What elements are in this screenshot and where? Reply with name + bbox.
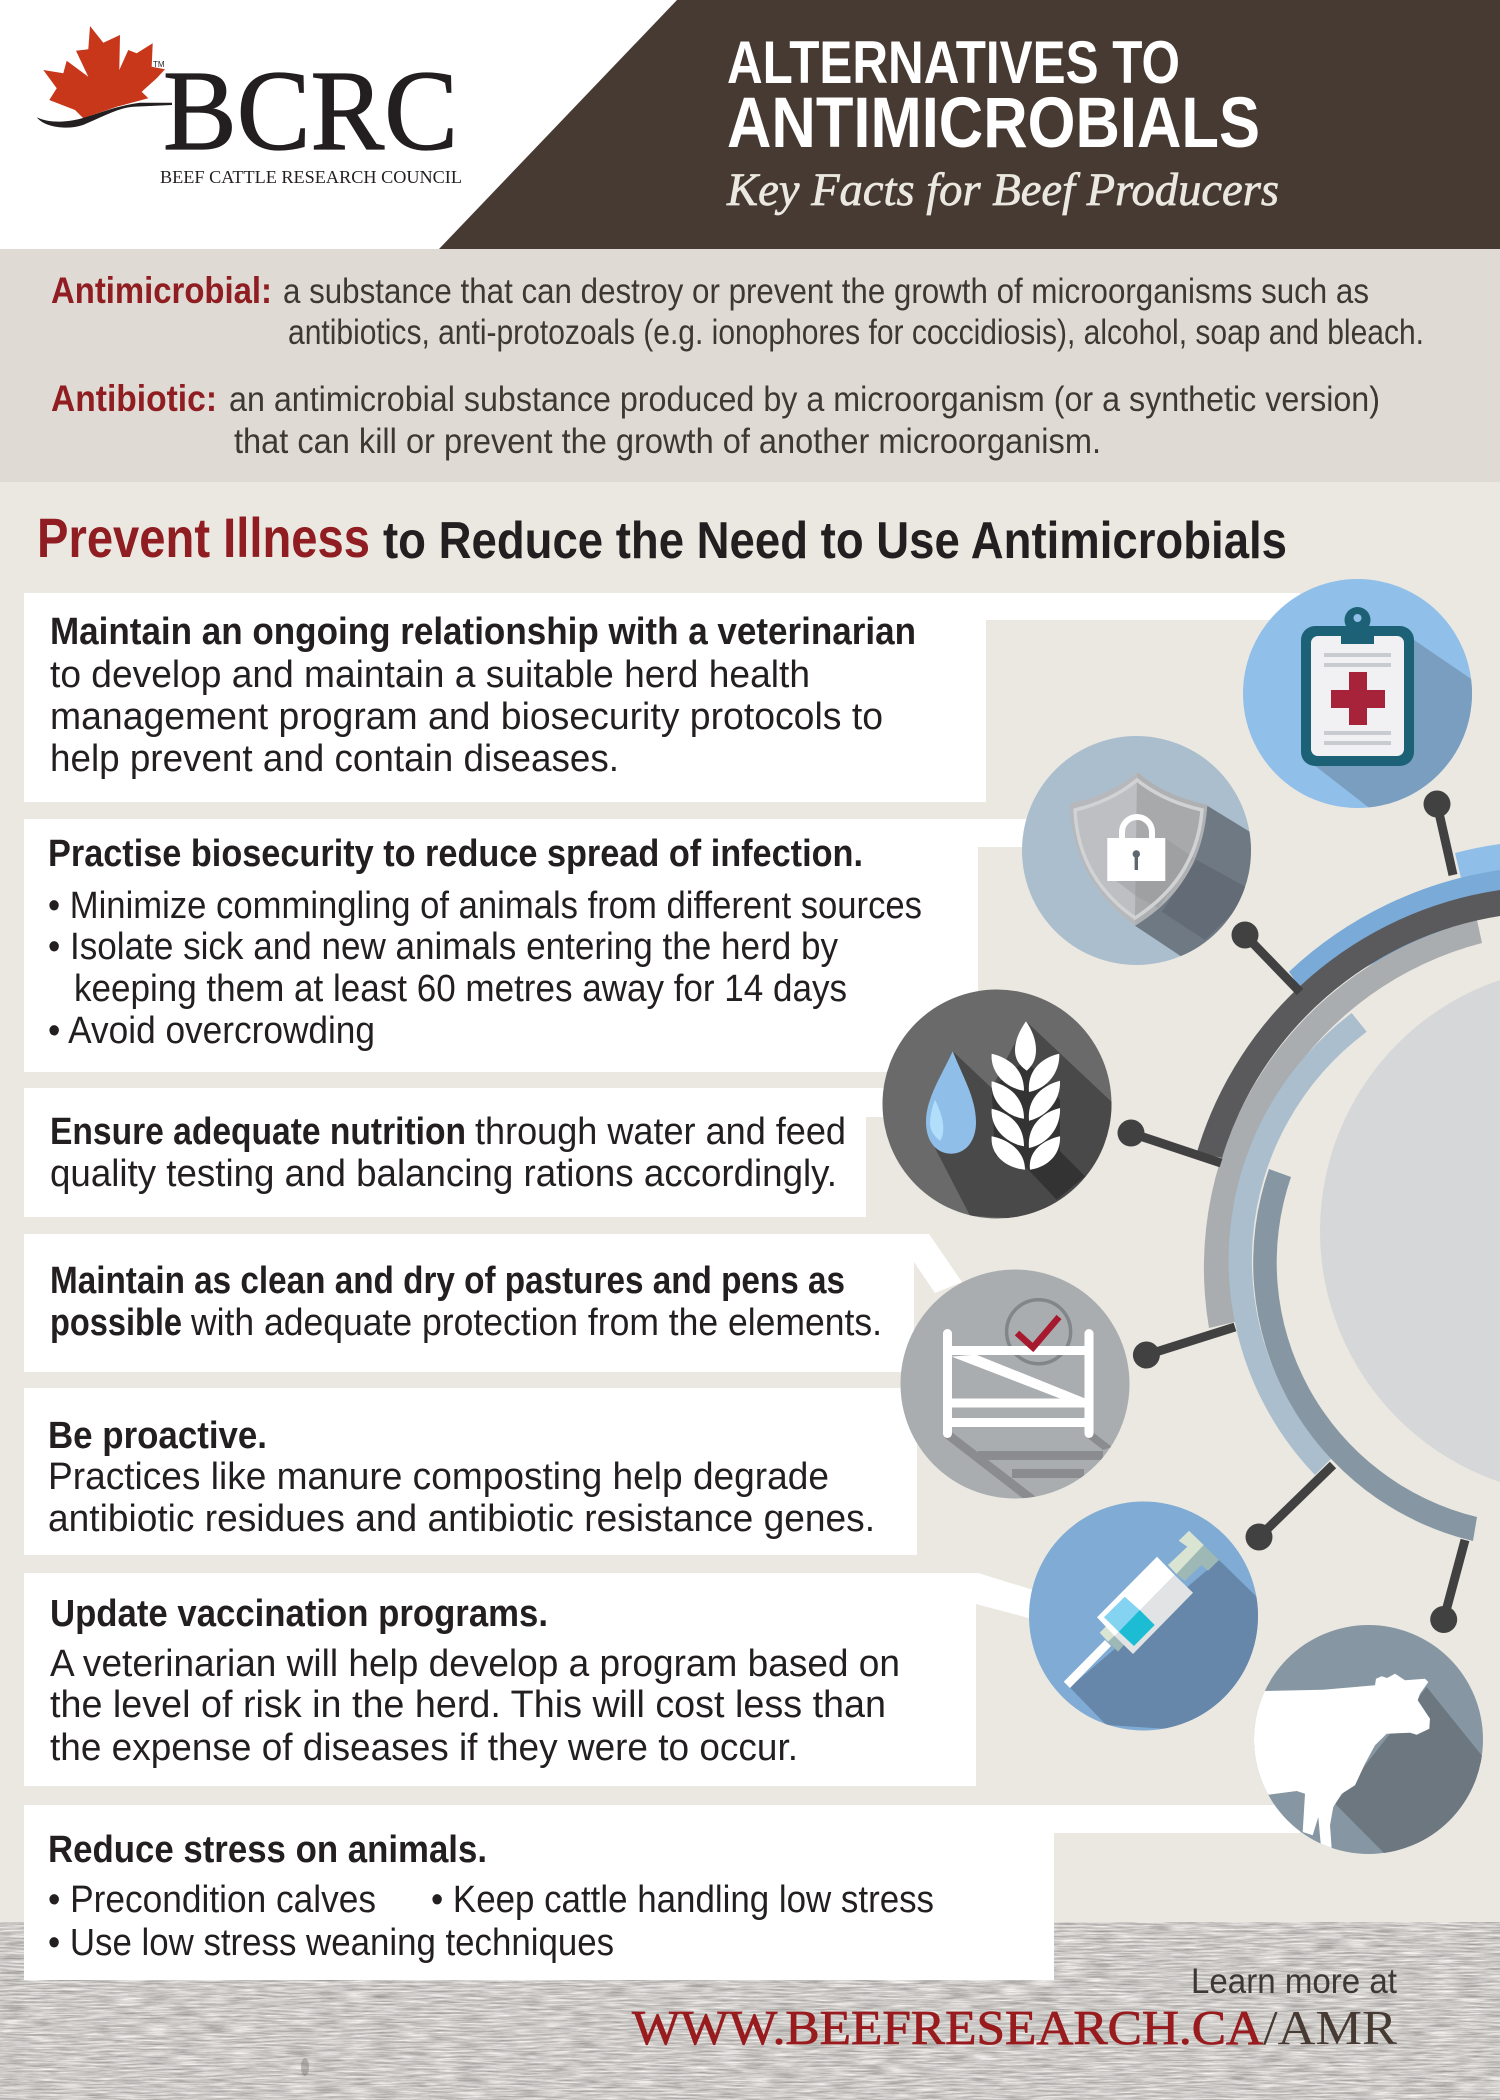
title: ANTIMICROBIALS — [727, 84, 1260, 163]
logo: BEEF CATTLE RESEARCH COUNCIL — [160, 167, 462, 187]
definition: antibiotic: Antibiotic: — [51, 378, 217, 419]
heading: Prevent Illness — [37, 506, 370, 569]
panel: nutrition: quality testing and balancing rations accordingly. — [50, 1153, 837, 1195]
panel: veterinarian: management program and biosecurity protocols to — [50, 696, 883, 738]
icon: gate with checkmark — [900, 1270, 1130, 1500]
panel: biosecurity: • Minimize commingling of animals from different sources — [48, 885, 922, 927]
panel: veterinarian — [24, 593, 1300, 802]
footer link: Learn more at — [1191, 1962, 1397, 2001]
panel: biosecurity: • Isolate sick and new animals entering the herd by — [48, 926, 838, 968]
panel: nutrition: Ensure adequate nutrition — [50, 1111, 466, 1153]
footer link — [632, 1962, 1397, 2055]
panel: be proactive: Be proactive. — [48, 1415, 267, 1457]
logo — [37, 26, 462, 187]
panel: clean and dry: with adequate protection from the elements. — [190, 1302, 882, 1344]
logo: BCRC — [163, 47, 458, 174]
panel: clean and dry: Maintain as clean and dry of pastures and pens as — [50, 1260, 845, 1302]
panel: definitions — [0, 249, 1500, 482]
panel: vaccination — [24, 1573, 1040, 1786]
definition: antimicrobial — [51, 270, 1424, 352]
heading — [37, 506, 1287, 570]
panel: vaccination: the level of risk in the herd. This will cost less than — [50, 1684, 886, 1726]
icon: clipboard — [1243, 579, 1480, 810]
icon: syringe — [1029, 1502, 1262, 1735]
panel: be proactive: Practices like manure composting help degrade — [48, 1456, 829, 1498]
definition: antibiotic: an antimicrobial substance produced by a microorganism (or a synthetic version) — [229, 380, 1380, 419]
panel: biosecurity: keeping them at least 60 metres away for 14 days — [74, 968, 847, 1010]
panel: reduce stress: Reduce stress on animals. — [48, 1829, 487, 1871]
panel: clean and dry — [24, 1234, 962, 1372]
icon: cow — [1250, 1625, 1487, 1860]
icon: shield and lock — [1022, 736, 1255, 970]
definition: antibiotic: that can kill or prevent the growth of another microorganism. — [234, 422, 1101, 461]
header — [0, 0, 1500, 249]
panel: be proactive — [24, 1388, 917, 1555]
panel: nutrition — [24, 1088, 900, 1217]
panel: reduce stress: • Use low stress weaning techniques — [48, 1922, 614, 1964]
definition: antimicrobial: Antimicrobial: — [51, 270, 272, 311]
panel: reduce stress — [24, 1805, 1300, 1980]
panel: vaccination: A veterinarian will help develop a program based on — [50, 1643, 900, 1685]
panel: veterinarian: Maintain an ongoing relationship with a veterinarian — [50, 611, 916, 653]
panel: reduce stress: • Precondition calves — [48, 1879, 376, 1921]
definition: antibiotic — [51, 378, 1380, 461]
heading: to Reduce the Need to Use Antimicrobials — [383, 512, 1287, 570]
panel: reduce stress: • Keep cattle handling low stress — [431, 1879, 934, 1921]
panel: biosecurity — [24, 819, 1060, 1072]
hub: concentric rings — [1197, 844, 1500, 1541]
wood footer background — [0, 1922, 1500, 2100]
panel: vaccination: the expense of diseases if they were to occur. — [50, 1727, 798, 1769]
panel: biosecurity: Practise biosecurity to reduce spread of infection. — [48, 833, 863, 875]
panel: biosecurity: • Avoid overcrowding — [48, 1010, 375, 1052]
panel: veterinarian: help prevent and contain diseases. — [50, 738, 619, 780]
title — [727, 29, 1260, 163]
connectors — [1118, 790, 1465, 1633]
subtitle: Key Facts for Beef Producers — [726, 164, 1279, 216]
footer link: /AMR — [1263, 2000, 1397, 2055]
footer link: WWW.BEEFRESEARCH.CA — [632, 2000, 1264, 2055]
panel: clean and dry: possible — [50, 1302, 182, 1344]
panel: nutrition: through water and feed — [475, 1111, 846, 1153]
definition: antimicrobial: a substance that can destroy or prevent the growth of microorganisms such as — [283, 272, 1369, 311]
panel: be proactive: antibiotic residues and antibiotic resistance genes. — [48, 1498, 875, 1540]
icon: water drop and wheat — [882, 990, 1115, 1225]
panel: veterinarian: to develop and maintain a suitable herd health — [50, 654, 810, 696]
panel: vaccination: Update vaccination programs. — [50, 1593, 548, 1635]
title: ALTERNATIVES TO — [727, 29, 1180, 96]
logo: TM — [153, 60, 165, 69]
